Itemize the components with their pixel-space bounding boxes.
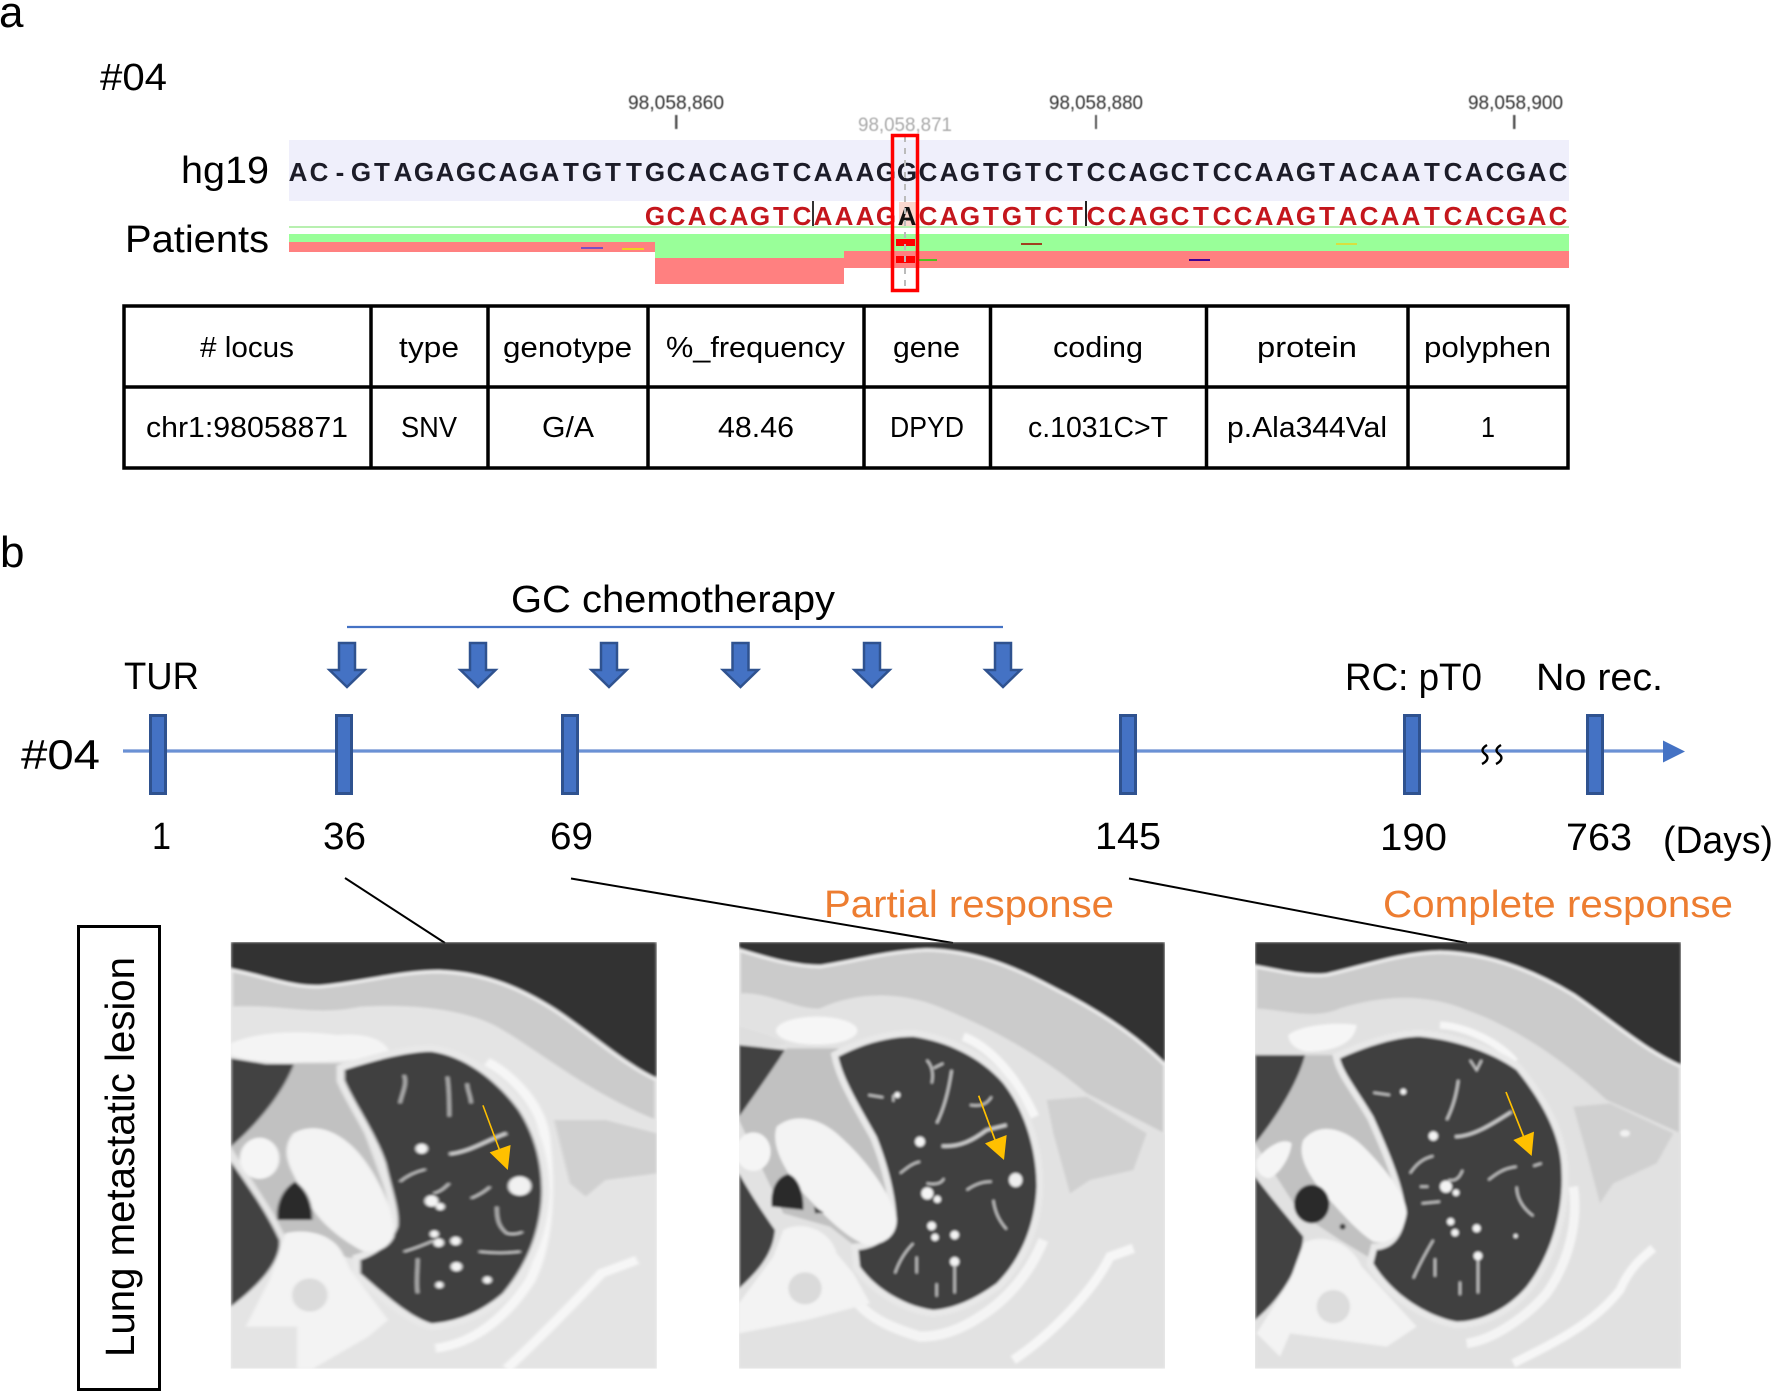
variant annotation table: polyphen xyxy=(1424,332,1551,364)
day labels xyxy=(152,816,1773,862)
day labels: 763 xyxy=(1566,817,1632,859)
panel label b: b xyxy=(0,528,24,577)
variant annotation table: 1 xyxy=(1481,412,1495,444)
variant annotation table: # locus xyxy=(200,332,294,364)
patient read sequence track xyxy=(289,201,1569,228)
day labels: 1 xyxy=(152,816,171,858)
track label hg19: hg19 xyxy=(181,150,269,192)
day labels: 190 xyxy=(1380,817,1447,859)
variant annotation table: type xyxy=(399,332,459,364)
event label No rec.: No rec. xyxy=(1536,657,1663,699)
variant annotation table: G/A xyxy=(542,412,595,444)
reference sequence track hg19: AC-GTAGAGCAGATGTTGCACAGTCAAAGGCAGTGTCTCCAGCTCCAAGTACAATCACGACT xyxy=(289,157,1587,187)
genome coordinate ruler: 98,058,860 xyxy=(628,93,724,114)
event label TUR: TUR xyxy=(124,656,199,698)
row label box: Lung metastatic lesion: Lung metastatic lesion xyxy=(97,957,143,1357)
timeline event bars xyxy=(150,716,1602,794)
panel b: treatment timeline and CT images xyxy=(0,528,1773,1390)
day labels: (Days) xyxy=(1663,820,1773,862)
genome coordinate ruler: 98,058,880 xyxy=(1049,93,1143,114)
event label RC: pT0: RC: pT0 xyxy=(1345,657,1482,699)
reference sequence track hg19 xyxy=(289,140,1587,201)
CT image day 36 xyxy=(231,942,657,1369)
chemotherapy cycle arrows xyxy=(330,643,1020,687)
patient read sequence track: CAGTGTCTCCAGCTCCAAGTACAATCACGACT xyxy=(919,201,1587,231)
case label #04: #04 xyxy=(100,57,167,99)
variant annotation table: chr1:98058871 xyxy=(146,412,348,444)
CT image day 69 xyxy=(736,942,1165,1369)
case label #04 on timeline: #04 xyxy=(21,731,100,778)
variant annotation table: protein xyxy=(1257,332,1357,364)
coverage track: green and red strand depth xyxy=(289,234,1569,284)
connector lines from days to images xyxy=(345,878,1467,943)
variant annotation table: 48.46 xyxy=(718,412,794,444)
day labels: 36 xyxy=(323,816,366,858)
variant annotation table: %_frequency xyxy=(666,332,846,364)
day labels: 145 xyxy=(1095,816,1161,858)
response label: Partial response: Partial response xyxy=(824,884,1114,926)
patient read sequence track: GCACAGTCAAAG xyxy=(645,201,896,231)
variant annotation table: SNV xyxy=(401,412,458,444)
CT image day 145 xyxy=(1255,942,1681,1369)
genome coordinate ruler: 98,058,900 xyxy=(1468,93,1563,114)
variant annotation table: coding xyxy=(1053,332,1143,364)
genome coordinate ruler: 98,058,871 xyxy=(858,115,952,136)
genome coordinate ruler xyxy=(628,93,1563,136)
variant annotation table xyxy=(124,306,1568,468)
timeline axis with arrowhead xyxy=(123,740,1685,762)
patient read sequence track: A xyxy=(898,201,917,231)
red highlight box at variant position xyxy=(892,136,918,290)
day labels: 69 xyxy=(550,816,593,858)
variant annotation table: p.Ala344Val xyxy=(1227,412,1387,444)
response label: Complete response: Complete response xyxy=(1383,884,1733,926)
variant annotation table: gene xyxy=(893,332,960,364)
track label Patients: Patients xyxy=(125,219,269,261)
row label box: Lung metastatic lesion xyxy=(78,926,160,1390)
variant annotation table: genotype xyxy=(503,332,632,364)
heading GC chemotherapy with bracket: GC chemotherapy xyxy=(511,579,835,621)
axis break symbol xyxy=(1482,745,1501,764)
variant annotation table: DPYD xyxy=(890,412,964,444)
variant annotation table: c.1031C>T xyxy=(1028,412,1168,444)
panel a: genome browser and variant table xyxy=(0,0,1587,468)
